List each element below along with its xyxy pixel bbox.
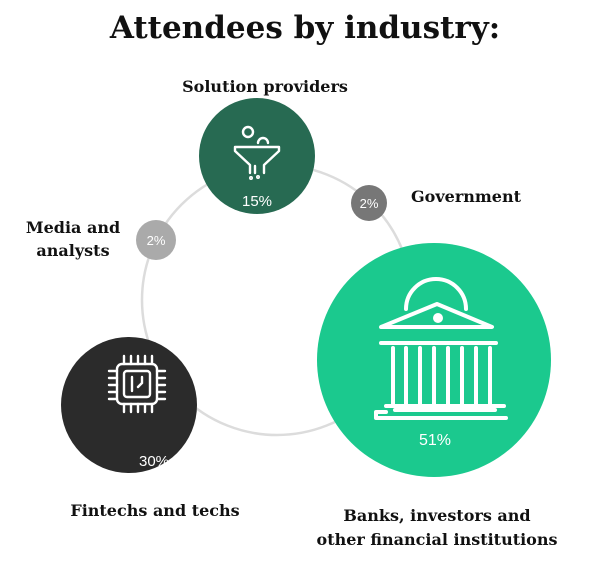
label: banks: Banks, investors and [343,506,531,525]
icon: bank building [376,279,506,418]
label: media and analysts: Media and [26,218,120,237]
circle: banks [317,243,551,477]
circle: government: 2% [360,196,379,211]
label: media and analysts: analysts [36,241,110,260]
icon: funnel [235,127,279,179]
title: Attendees by industry: [109,10,500,46]
label: fintechs: Fintechs and techs [70,501,240,520]
circle: fintechs: 30% [139,453,169,470]
circle: banks: 51% [419,432,451,449]
circle: fintechs [61,337,197,473]
circle: government [351,185,387,221]
icon: chip [109,356,165,412]
circle: media: 2% [147,233,166,248]
label: government: Government [411,187,522,206]
label: solution providers: Solution providers [182,77,348,96]
circle: solution providers: 15% [242,193,272,210]
circle: media [136,220,176,260]
label: banks: other financial institutions [317,530,557,549]
circle: solution providers [199,98,315,214]
